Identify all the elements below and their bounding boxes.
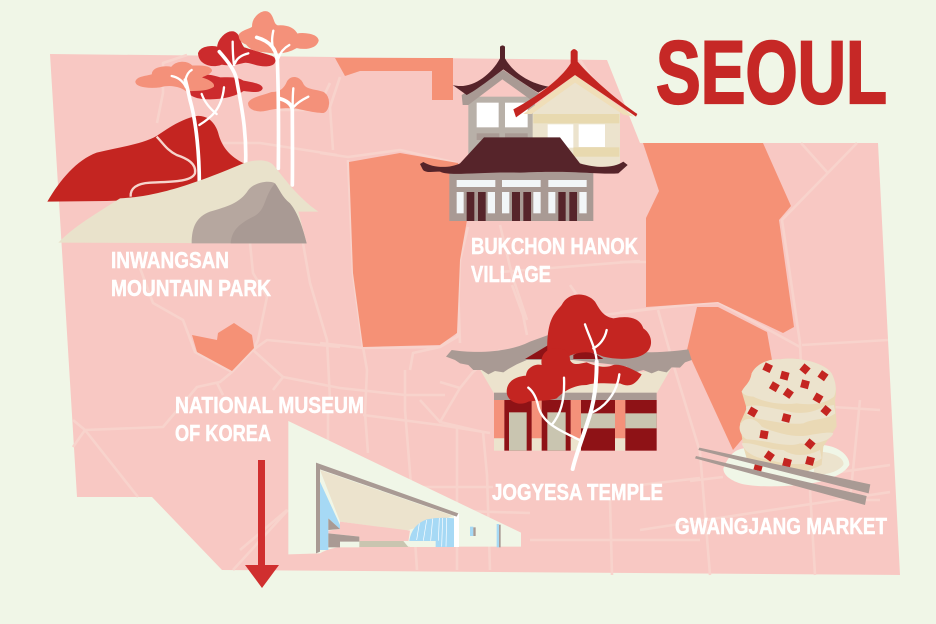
illustration: Jogyesa temple with tree <box>446 295 692 469</box>
illustration: Gwangjang market bindaetteok on plate <box>695 359 870 505</box>
illustration: Bukchon hanok houses <box>420 45 637 221</box>
label: Inwangsan Mountain Park <box>111 247 271 301</box>
map of Seoul <box>50 54 900 575</box>
illustration: Inwangsan mountain with pine trees <box>47 12 328 243</box>
label: Bukchon Hanok Village: BUKCHON HANOK <box>471 233 638 259</box>
label: National Museum of Korea: NATIONAL MUSEUM <box>175 392 364 418</box>
arrow pointing south <box>245 460 279 588</box>
illustration: National Museum of Korea building <box>288 421 521 554</box>
label: National Museum of Korea <box>175 392 364 446</box>
label: National Museum of Korea: OF KOREA <box>175 420 271 446</box>
label: Inwangsan Mountain Park: MOUNTAIN PARK <box>111 275 271 301</box>
label: Jogyesa Temple: JOGYESA TEMPLE <box>492 479 663 505</box>
label: Inwangsan Mountain Park: INWANGSAN <box>111 247 229 273</box>
label: Bukchon Hanok Village <box>471 233 638 287</box>
label: Bukchon Hanok Village: VILLAGE <box>471 261 551 287</box>
parks <box>192 58 794 450</box>
label: Gwangjang Market: GWANGJANG MARKET <box>675 513 887 539</box>
